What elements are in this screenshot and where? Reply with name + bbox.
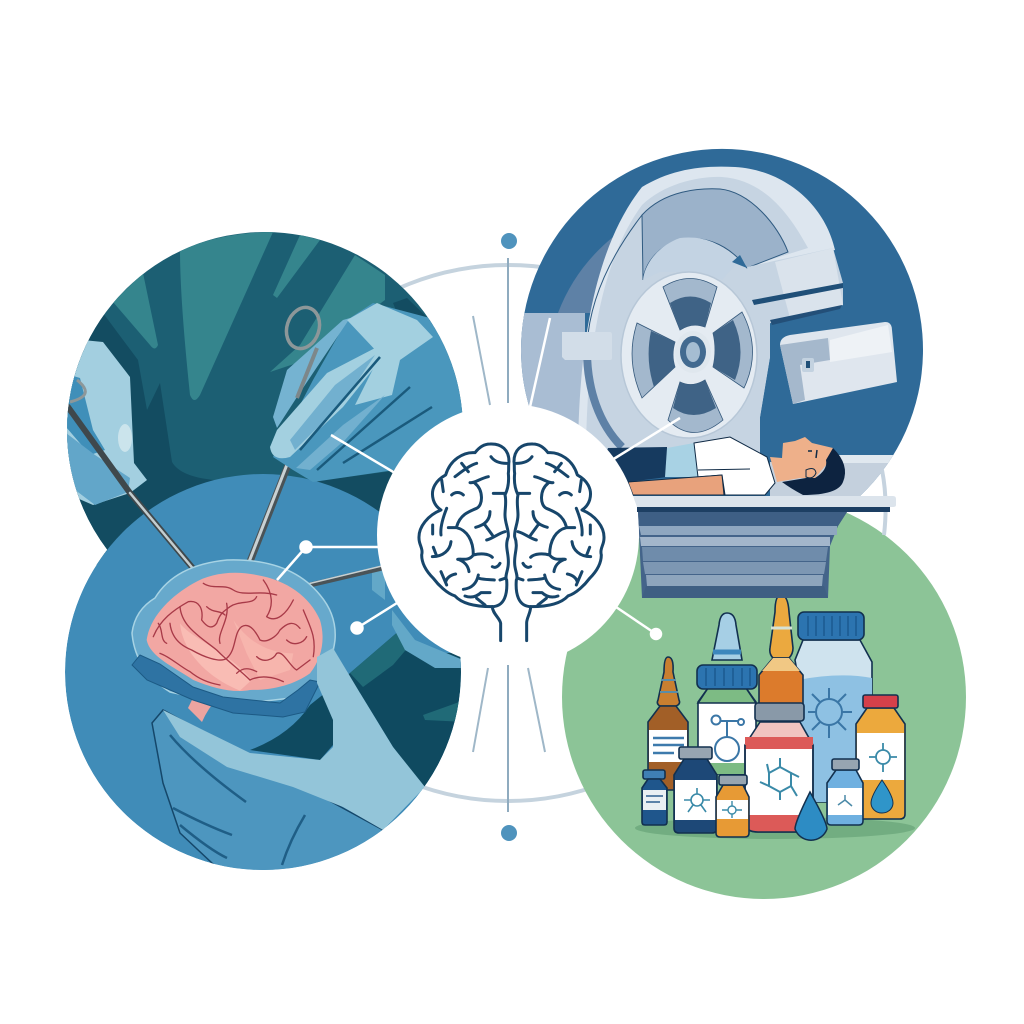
bottle: amber ampoule: [648, 657, 688, 790]
vial: small orange: [716, 775, 749, 837]
scissors upper blades: [247, 464, 290, 560]
head unit one: [747, 248, 843, 325]
panel: radiotherapy machine: [515, 145, 930, 598]
treatment table: [633, 496, 896, 598]
outer ring: [240, 265, 776, 801]
icon: brain outline: [419, 444, 604, 641]
dark area at lower right: [250, 565, 470, 790]
probe right: [309, 566, 382, 587]
left hemisphere: [419, 444, 509, 641]
bottle: large blue: [795, 612, 872, 802]
disc cut-outs: [632, 278, 753, 432]
infographic illustration: [65, 148, 966, 899]
table shadow: [635, 817, 915, 839]
side block: [521, 313, 585, 425]
vial: navy with label: [674, 747, 717, 833]
callout lines: [530, 318, 680, 460]
right glove holding scissors: [270, 303, 463, 482]
lower blue circle: [65, 474, 461, 870]
patient: [600, 437, 845, 495]
bottle: orange ampoule: [759, 595, 803, 704]
head unit two: [780, 322, 897, 404]
bottle: red large: [745, 703, 813, 832]
darker gantry shadow: [558, 237, 613, 313]
vial: small blue: [827, 759, 863, 825]
brain stem: [188, 700, 211, 722]
head support behind patient: [770, 455, 905, 496]
radiotherapy backdrop: [515, 145, 930, 500]
gantry disc: [621, 272, 757, 438]
dots on axis: [501, 233, 517, 841]
centre white circle: [377, 404, 639, 666]
pink brain: [147, 573, 323, 691]
icon: water drop: [795, 792, 827, 840]
small box on gantry: [562, 332, 612, 360]
axis lines and rays: [473, 258, 545, 812]
panel: medication: [562, 495, 966, 899]
brain dome: [132, 560, 335, 705]
right hemisphere: [514, 444, 604, 641]
disc hub: [680, 336, 706, 368]
scissors left: [68, 404, 195, 568]
dark blue tissue under the brain: [132, 655, 320, 717]
callout lines: [277, 435, 397, 634]
bottom glove: [152, 648, 425, 880]
table support line: [882, 470, 886, 535]
panel: surgery: [60, 225, 470, 880]
left glove: [60, 338, 147, 505]
vial: small navy: [642, 770, 667, 825]
bottle: yellow right: [856, 695, 905, 819]
callout line and dot: [616, 607, 661, 639]
gantry arm: [578, 167, 835, 460]
bottle: green dropper: [697, 613, 757, 774]
surgery backdrop: [60, 225, 470, 565]
